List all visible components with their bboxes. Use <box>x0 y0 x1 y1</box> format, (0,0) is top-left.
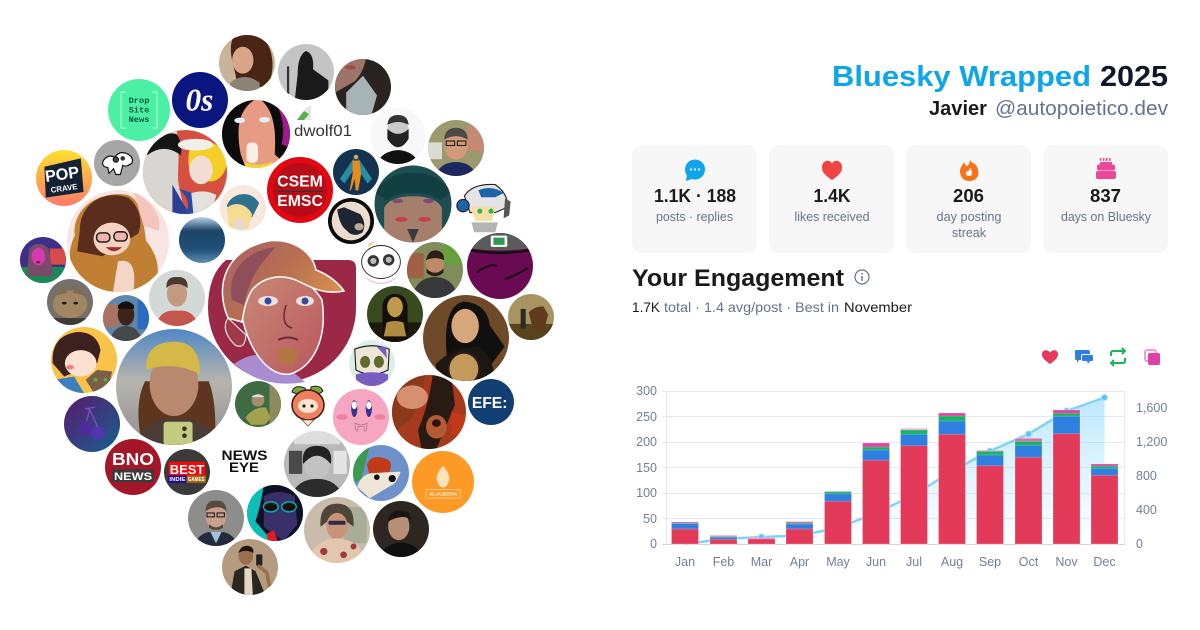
stat card: days on Bluesky <box>1043 145 1168 253</box>
legend: replies bubbles <box>1075 350 1093 364</box>
avatar: Drop Site News logo: Site <box>129 105 149 115</box>
avatar: man with hat in forest <box>235 381 281 427</box>
avatar: cat <box>47 279 93 325</box>
chart legend icons <box>1042 348 1160 366</box>
icon: chat bubble <box>685 160 705 181</box>
left axis labels: 300 <box>636 384 657 398</box>
avatar: Os logo: 0s <box>185 83 213 118</box>
right axis labels: 0 <box>1136 537 1143 551</box>
title year: 2025 <box>1100 61 1168 93</box>
avatar: Best Indie Games logo: BEST <box>170 462 204 477</box>
avatar: pop art couple <box>143 130 227 214</box>
right axis labels: 800 <box>1136 469 1157 483</box>
bar: August <box>938 413 966 544</box>
left axis labels: 250 <box>636 410 657 424</box>
engagement summary line: 1.7K <box>632 299 661 315</box>
stat card: days on Bluesky: 837 <box>1090 186 1121 206</box>
avatar bubble cluster <box>20 35 554 595</box>
avatar: Best Indie Games logo <box>164 449 210 495</box>
avatar: CSEM EMSC logo <box>267 157 333 223</box>
bar: March <box>748 538 775 544</box>
bar: June <box>862 443 890 544</box>
left axis labels: 200 <box>636 435 657 449</box>
icon: flame <box>960 159 978 181</box>
avatar: Drop Site News logo: Drop <box>129 96 149 106</box>
icon: birthday cake <box>1096 158 1116 179</box>
bar: July <box>900 428 928 544</box>
avatar: smiling man with glasses <box>428 120 484 176</box>
cumulative area <box>685 398 1104 544</box>
avatar: sor juana portrait <box>423 295 509 385</box>
avatar: man with blue background <box>103 295 149 341</box>
avatar: News Eye logo: EYE <box>229 459 259 475</box>
engagement summary line <box>632 299 912 315</box>
right axis labels: 1,200 <box>1136 435 1167 449</box>
avatar: man in library black and white <box>284 431 350 497</box>
left axis labels: 50 <box>643 512 657 526</box>
month labels: Mar <box>751 555 772 569</box>
title: Bluesky Wrapped 2025: Bluesky Wrapped <box>832 61 1091 93</box>
avatar: blurred red face <box>392 375 466 449</box>
avatar: mona lisa <box>367 286 423 342</box>
avatar: blue lake <box>179 217 225 263</box>
heading: Your Engagement: Your Engagement <box>632 265 844 292</box>
stat card: posts and replies: posts · replies <box>656 209 733 224</box>
avatar: Al Jazeera logo: ALJAZEERA <box>429 492 458 497</box>
bar: May <box>824 491 852 544</box>
stat card: likes received: 1.4K <box>814 186 850 206</box>
stat card: likes received <box>769 145 894 253</box>
engagement chart <box>636 384 1167 569</box>
bar: April <box>786 522 813 544</box>
avatar: Best Indie Games logo: GAMES <box>188 477 205 483</box>
stat card: day posting streak: 206 <box>953 186 984 206</box>
avatar: BNO News logo <box>105 439 161 495</box>
month labels: Feb <box>713 555 734 569</box>
avatar: woman in yellow cap <box>116 329 232 445</box>
stat card: posts and replies: 1.1K · 188 <box>654 186 736 206</box>
avatar: panda skull character <box>349 340 395 386</box>
avatar: teal hair mirrored face <box>374 166 452 242</box>
avatar: Os logo <box>172 72 228 128</box>
avatar: News Eye logo <box>222 447 268 475</box>
chart grid <box>662 391 1125 544</box>
month labels: Jul <box>906 555 922 569</box>
avatar: neon portrait <box>20 237 66 283</box>
avatar: EFE logo <box>468 379 514 425</box>
avatar: News Eye logo: NEWS <box>222 447 268 463</box>
stat card: day posting streak: day posting <box>936 209 1002 224</box>
month labels: Apr <box>790 555 809 569</box>
avatar: curly haired illustration <box>67 190 169 292</box>
right axis labels <box>1136 401 1167 551</box>
avatar: CSEM EMSC logo: EMSC <box>277 193 323 210</box>
month labels: Jan <box>675 555 695 569</box>
legend: likes heart <box>1042 350 1058 364</box>
avatar: illustrated girl with cat <box>51 327 117 393</box>
avatar: Drop Site News logo: News <box>129 115 149 125</box>
left axis labels <box>636 384 657 551</box>
bar: December <box>1091 464 1118 544</box>
avatar: POP CRAVE logo: POP <box>44 163 81 186</box>
user display name: Javier <box>929 98 987 120</box>
avatar: orange superhero <box>333 149 379 195</box>
engagement summary line: November <box>844 299 912 315</box>
avatar: man with glasses and blazer <box>188 490 244 546</box>
avatar: Best Indie Games logo: INDIE <box>169 477 186 483</box>
left axis labels: 100 <box>636 486 657 500</box>
avatar: cartoon squirrel <box>353 445 409 501</box>
bar: September <box>976 450 1004 544</box>
left axis labels: 150 <box>636 461 657 475</box>
avatar: cyndaquil <box>220 185 266 231</box>
broken image icon and dwolf01 label: dwolf01 <box>294 123 352 140</box>
cumulative line <box>685 394 1108 544</box>
avatar: wonder woman comic <box>222 100 290 168</box>
avatar: Al Jazeera logo <box>412 451 474 513</box>
avatar: grey dog <box>94 140 140 186</box>
avatar: BNO News logo: BNO <box>112 449 154 469</box>
avatar: POP CRAVE logo: CRAVE <box>50 182 78 195</box>
broken image icon and dwolf01 label <box>294 105 352 140</box>
month labels: Nov <box>1055 555 1078 569</box>
avatar: vader with sunglasses <box>247 485 303 541</box>
user handle: @autopoietico.dev <box>995 98 1168 120</box>
avatar: dark jacket woman <box>335 59 391 115</box>
bar: November <box>1053 410 1080 544</box>
bar: February <box>710 535 737 544</box>
avatar: CSEM EMSC logo: CSEM <box>277 174 323 191</box>
avatar: cherries <box>64 396 120 452</box>
bar: October <box>1015 438 1042 544</box>
stat card: posts and replies <box>632 145 757 253</box>
avatar: EFE logo: EFE: <box>472 395 507 412</box>
month labels: Sep <box>979 555 1001 569</box>
month labels: Dec <box>1093 555 1116 569</box>
legend: reposts arrows <box>1111 348 1125 366</box>
avatar: bearded man at table <box>407 242 463 298</box>
avatar: horse painting <box>508 294 554 340</box>
avatar: man in dark room <box>373 501 429 557</box>
avatar: raccoon meme <box>328 198 374 244</box>
stat card: day posting streak <box>906 145 1031 253</box>
avatar: white ghost character <box>361 242 401 284</box>
icon: heart <box>822 161 842 180</box>
month labels <box>675 555 1116 569</box>
stat card: likes received: likes received <box>794 209 870 224</box>
avatar: Drop Site News logo <box>108 79 170 141</box>
engagement summary line: total · 1.4 avg/post · Best in <box>664 299 839 315</box>
right axis labels: 400 <box>1136 503 1157 517</box>
avatar: bearded man black and white <box>380 115 416 164</box>
avatar: woman in floral shirt <box>304 497 370 563</box>
avatar: strawberry mascot <box>292 386 324 426</box>
avatar: purple comic character <box>467 233 533 299</box>
avatar: kirby <box>333 389 389 445</box>
avatar: big illustrated character <box>208 241 356 384</box>
icon: info <box>855 270 869 284</box>
month labels: Jun <box>866 555 886 569</box>
month labels: Oct <box>1019 555 1039 569</box>
avatar: robot kid character <box>456 184 511 232</box>
stat card: day posting streak: streak <box>952 225 986 240</box>
stat card: days on Bluesky: days on Bluesky <box>1061 209 1151 224</box>
bar: January <box>672 522 698 544</box>
left axis labels: 0 <box>650 537 657 551</box>
avatar: mirror selfie man <box>222 539 278 595</box>
avatar: BNO News logo: NEWS <box>114 471 153 483</box>
avatar: woman with dark hair <box>219 35 275 91</box>
legend: quotes copy <box>1145 350 1160 365</box>
avatar: man in red shirt <box>149 270 205 326</box>
month labels: May <box>826 555 851 569</box>
avatar: POP CRAVE logo <box>36 150 92 206</box>
stacked monthly bars <box>672 410 1118 544</box>
right axis labels: 1,600 <box>1136 401 1167 415</box>
month labels: Aug <box>941 555 963 569</box>
avatar: grey woman in black <box>278 44 334 100</box>
